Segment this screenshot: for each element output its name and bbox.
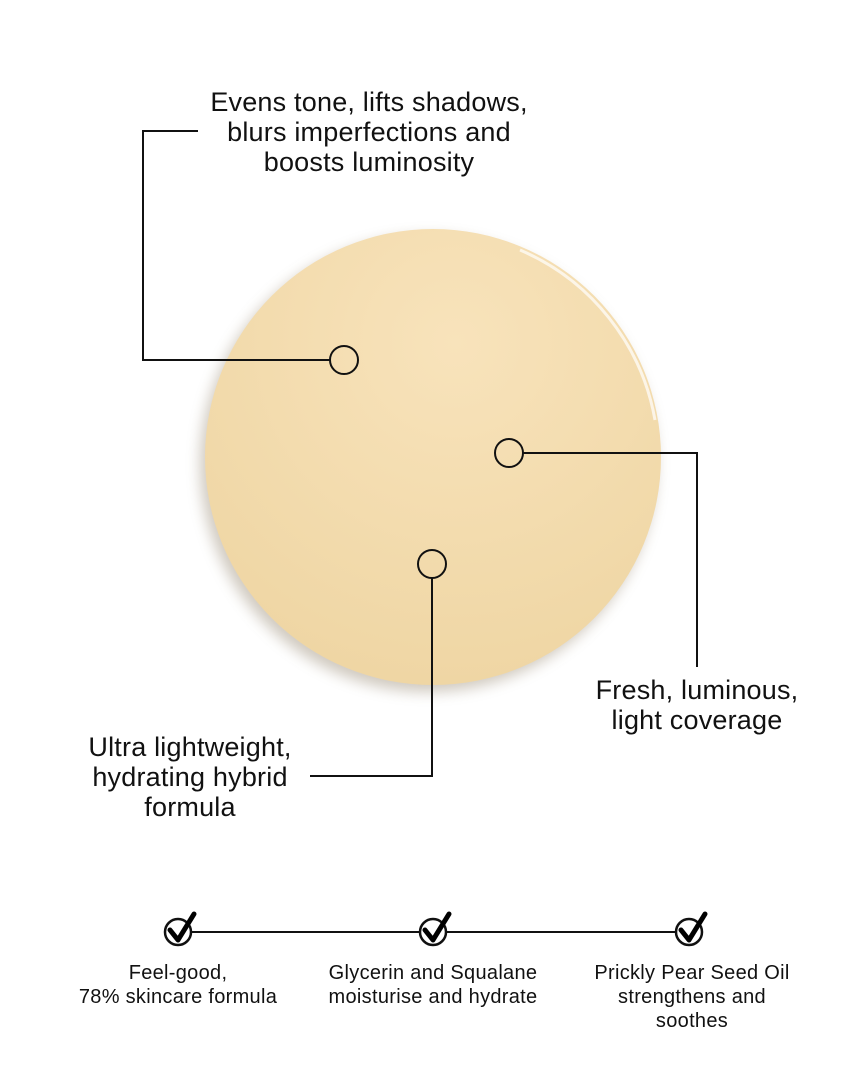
benefit 1: Feel-good, xyxy=(129,962,227,984)
label: right xyxy=(596,675,798,735)
label: top: blurs imperfections and xyxy=(227,117,511,147)
benefit 3 xyxy=(594,962,790,1032)
label: top: boosts luminosity xyxy=(264,147,474,177)
label: bottom-left xyxy=(88,732,292,822)
benefit 3: Prickly Pear Seed Oil xyxy=(594,962,790,984)
label: bottom-left: formula xyxy=(144,792,236,822)
benefit 2: moisturise and hydrate xyxy=(329,986,537,1008)
label: bottom-left: hydrating hybrid xyxy=(92,762,288,792)
benefit 1: 78% skincare formula xyxy=(79,986,277,1008)
swatch xyxy=(205,229,661,685)
callout: bottom xyxy=(310,550,446,776)
label: right: light coverage xyxy=(612,705,782,735)
swatch shadow xyxy=(200,236,656,692)
callout: top-left xyxy=(143,131,358,374)
benefit 2: Glycerin and Squalane xyxy=(329,962,537,984)
benefit 3: soothes xyxy=(656,1010,728,1032)
label: right: Fresh, luminous, xyxy=(596,675,798,705)
label: top xyxy=(210,87,528,177)
callout: right xyxy=(495,439,697,667)
benefit 2 xyxy=(329,962,537,1008)
benefit 3: strengthens and xyxy=(618,986,766,1008)
label: top: Evens tone, lifts shadows, xyxy=(210,87,528,117)
label: bottom-left: Ultra lightweight, xyxy=(88,732,292,762)
check timeline xyxy=(165,914,705,945)
benefit 1 xyxy=(79,962,277,1008)
